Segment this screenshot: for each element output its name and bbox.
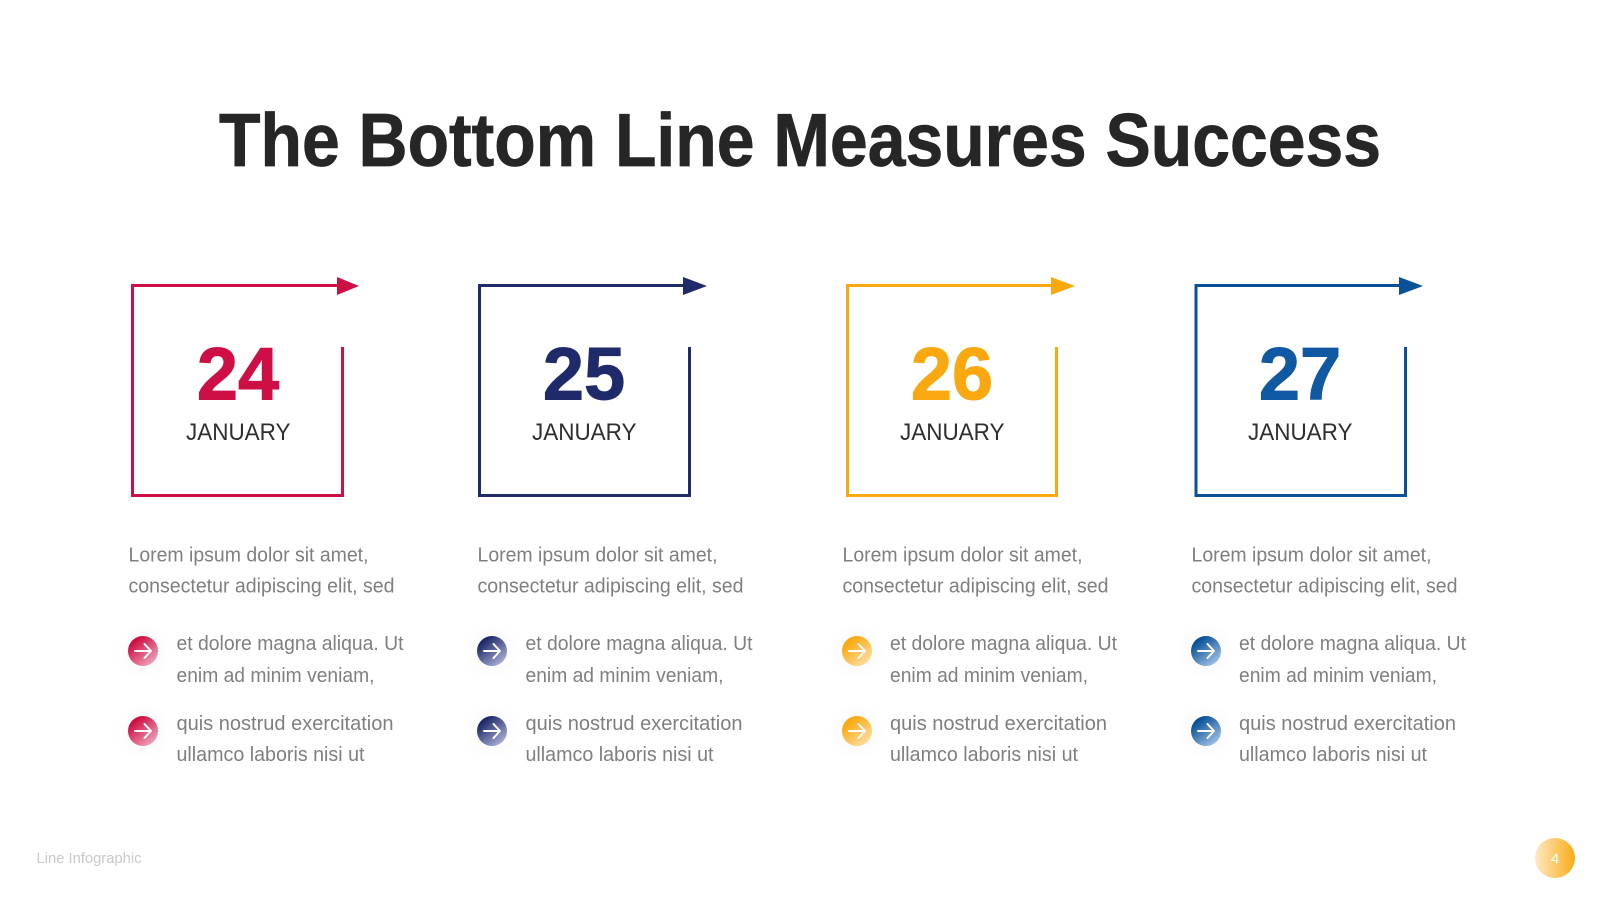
intro text: consectetur adipiscing elit, sed — [128, 576, 394, 598]
month: JANUARY — [532, 419, 636, 446]
icon: arrow bullet — [827, 621, 887, 681]
bullet text: et dolore magna aliqua. Ut — [1239, 633, 1466, 655]
footer label: Line Infographic — [36, 850, 142, 867]
bullet text — [890, 633, 1117, 687]
bullet text — [1239, 633, 1466, 687]
date frame arrow — [1196, 277, 1423, 496]
bullet text: enim ad minim veniam, — [890, 665, 1088, 687]
month: JANUARY — [900, 419, 1004, 446]
bullet text: et dolore magna aliqua. Ut — [890, 633, 1117, 655]
bullet text — [176, 633, 404, 687]
panel: 26 January — [827, 277, 1117, 766]
icon: arrow bullet — [462, 701, 522, 761]
panel: 27 January — [1176, 277, 1466, 766]
bullet text — [1239, 713, 1456, 766]
icon: arrow bullet — [113, 701, 173, 761]
icon: arrow bullet — [113, 621, 173, 681]
bullet text: quis nostrud exercitation — [1239, 713, 1456, 735]
panel: 25 January — [462, 277, 753, 766]
bullet text: enim ad minim veniam, — [1239, 665, 1437, 687]
month: JANUARY — [1248, 419, 1352, 446]
date frame arrow — [848, 277, 1075, 496]
bullet text — [526, 713, 742, 766]
bullet text: enim ad minim veniam, — [526, 665, 724, 687]
bullet text: ullamco laboris nisi ut — [890, 744, 1078, 766]
bullet text: quis nostrud exercitation — [890, 713, 1107, 735]
icon: arrow bullet — [1176, 701, 1236, 761]
intro text — [842, 544, 1108, 598]
date frame arrow — [480, 277, 707, 496]
bullet text: ullamco laboris nisi ut — [176, 744, 365, 766]
date number: 27 — [1259, 332, 1341, 416]
bullet text: et dolore magna aliqua. Ut — [526, 633, 753, 655]
date number: 26 — [911, 332, 993, 416]
intro text: Lorem ipsum dolor sit amet, — [842, 544, 1082, 566]
date number: 25 — [543, 332, 625, 416]
bullet text: quis nostrud exercitation — [176, 713, 394, 735]
intro text — [1192, 544, 1458, 598]
page number badge — [1535, 838, 1575, 878]
date frame arrow — [132, 277, 359, 496]
icon: arrow bullet — [827, 701, 887, 761]
bullet text — [176, 713, 394, 766]
title: The Bottom Line Measures Success — [219, 98, 1381, 182]
intro text: consectetur adipiscing elit, sed — [1192, 576, 1458, 598]
date number: 24 — [197, 332, 279, 416]
icon: arrow bullet — [462, 621, 522, 681]
icon: arrow bullet — [1176, 621, 1236, 681]
bullet text: quis nostrud exercitation — [526, 713, 742, 735]
intro text: consectetur adipiscing elit, sed — [478, 576, 744, 598]
bullet text: et dolore magna aliqua. Ut — [176, 633, 404, 655]
month: JANUARY — [186, 419, 290, 446]
panel: 24 January — [113, 277, 404, 766]
bullet text: enim ad minim veniam, — [176, 665, 374, 687]
bullet text: ullamco laboris nisi ut — [526, 744, 714, 766]
bullet text — [890, 713, 1107, 766]
intro text: Lorem ipsum dolor sit amet, — [128, 544, 368, 566]
bullet text: ullamco laboris nisi ut — [1239, 744, 1427, 766]
intro text — [478, 544, 744, 598]
page number badge: 4 — [1551, 850, 1559, 868]
intro text: consectetur adipiscing elit, sed — [842, 576, 1108, 598]
intro text — [128, 544, 394, 598]
bullet text — [526, 633, 753, 687]
intro text: Lorem ipsum dolor sit amet, — [1192, 544, 1432, 566]
intro text: Lorem ipsum dolor sit amet, — [478, 544, 718, 566]
